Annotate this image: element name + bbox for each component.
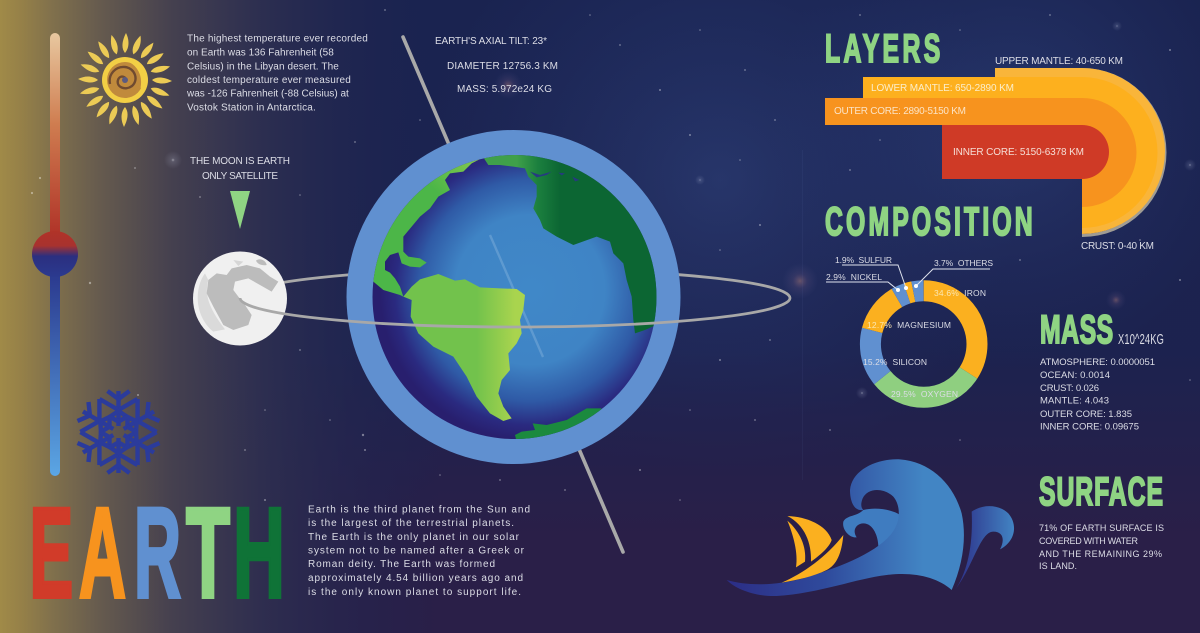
Earth description: The Earth is the only planet in our solar: [308, 532, 520, 543]
surface text: AND THE REMAINING 29%: [1039, 549, 1162, 559]
icon: ocean wave and sailboat: [727, 459, 1014, 596]
heading: MASS: MASS: [1040, 308, 1113, 353]
mass list: INNER CORE: 0.09675: [1040, 422, 1139, 432]
Earth globe: [346, 130, 680, 464]
title: EARTH: R: [134, 482, 181, 625]
Earth axis line: [403, 37, 623, 552]
Earth description: is the largest of the terrestrial planets.: [308, 518, 514, 529]
composition labels: 12.7% MAGNESIUM: [867, 320, 951, 330]
Earth description: Roman deity. The Earth was formed: [308, 559, 495, 570]
Earth description: Earth is the third planet from the Sun and: [308, 504, 530, 516]
sailboat: [782, 516, 843, 583]
icon: sun: [78, 33, 172, 127]
icon: snowflake: [73, 391, 164, 473]
title: EARTH: T: [186, 482, 230, 625]
atmosphere ring: [346, 130, 680, 464]
Earth stats: EARTH'S AXIAL TILT: 23*: [435, 36, 547, 47]
mass list: OUTER CORE: 1.835: [1040, 409, 1132, 420]
title: EARTH: E: [30, 482, 73, 625]
title: EARTH: [30, 482, 285, 625]
moon: [193, 252, 287, 346]
mass list: CRUST: 0.026: [1040, 383, 1099, 394]
composition labels: [826, 255, 993, 399]
surface text: [1039, 523, 1164, 571]
temperature text: coldest temperature ever measured: [187, 75, 351, 86]
layer labels: INNER CORE: 5150-6378 KM: [953, 147, 1084, 158]
layer labels: LOWER MANTLE: 650-2890 KM: [871, 83, 1014, 94]
Earth description: approximately 4.54 billion years ago and: [308, 573, 523, 584]
thermometer: [32, 33, 78, 476]
chart: Earth layers cross-section: [825, 56, 1166, 252]
temperature text: was -126 Fahrenheit (-88 Celsius) at: [186, 88, 349, 100]
composition labels: 29.5% OXYGEN: [891, 389, 958, 399]
layer labels: UPPER MANTLE: 40-650 KM: [995, 56, 1123, 67]
heading: SURFACE: SURFACE: [1039, 470, 1163, 515]
moon orbit: front half: [240, 298, 790, 327]
Earth stats: DIAMETER 12756.3 KM: [447, 61, 558, 72]
composition labels: 3.7% OTHERS: [934, 258, 993, 268]
chart: composition donut: [826, 255, 993, 399]
temperature text: Celsius) in the Libyan desert. The: [187, 62, 339, 72]
temperature text: Vostok Station in Antarctica.: [187, 102, 316, 114]
layer labels: CRUST: 0-40 KM: [1081, 241, 1154, 252]
title: EARTH: A: [79, 482, 126, 625]
surface text: IS LAND.: [1039, 561, 1077, 571]
composition labels: 1.9% SULFUR: [835, 255, 892, 265]
moon caption: [190, 156, 290, 182]
callout leader lines: [826, 265, 990, 290]
mass list: ATMOSPHERE: 0.0000051: [1040, 357, 1155, 368]
Earth stats: [435, 36, 558, 95]
composition labels: 2.9% NICKEL: [826, 272, 882, 282]
ocean: [372, 155, 656, 439]
surface text: COVERED WITH WATER: [1039, 536, 1138, 546]
arrow: pointer to moon: [230, 191, 250, 229]
layer labels: [834, 56, 1154, 252]
moon caption: THE MOON IS EARTH: [190, 156, 290, 167]
mass list: [1040, 357, 1155, 432]
Earth description: [308, 504, 530, 598]
heading: MASS: [1040, 308, 1164, 353]
temperature text: on Earth was 136 Fahrenheit (58: [187, 48, 334, 58]
heading: COMPOSITION: COMPOSITION: [825, 200, 1033, 245]
Earth stats: MASS: 5.972e24 KG: [457, 84, 552, 95]
surface text: 71% OF EARTH SURFACE IS: [1039, 523, 1164, 533]
heading: MASS: X10^24KG: [1118, 331, 1164, 348]
temperature text: [186, 34, 368, 114]
continents: [373, 155, 656, 439]
Earth description: system not to be named after a Greek or: [308, 546, 525, 556]
layer labels: OUTER CORE: 2890-5150 KM: [834, 106, 966, 117]
mass list: MANTLE: 4.043: [1040, 396, 1109, 406]
title: EARTH: H: [233, 482, 285, 625]
composition labels: 15.2% SILICON: [863, 357, 927, 367]
moon caption: ONLY SATELLITE: [202, 171, 278, 182]
temperature text: The highest temperature ever recorded: [187, 34, 368, 44]
mass list: OCEAN: 0.0014: [1040, 370, 1110, 381]
composition labels: 34.6% IRON: [934, 288, 986, 298]
Earth description: is the only known planet to support life.: [308, 587, 521, 598]
moon orbit: back half: [240, 269, 790, 298]
heading: LAYERS: LAYERS: [825, 27, 940, 72]
